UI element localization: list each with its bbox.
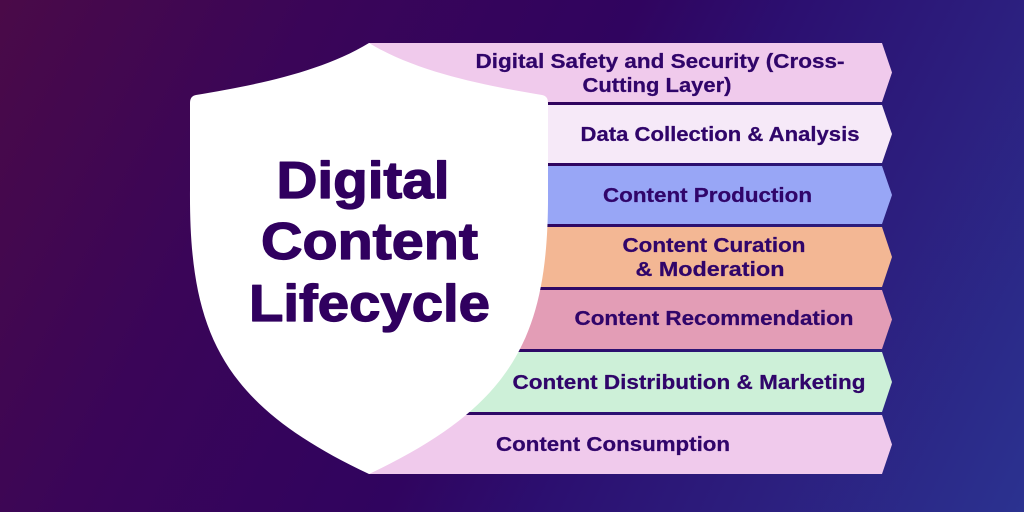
stage: Content Curation & Moderation: [530, 227, 892, 287]
title: Content: [261, 213, 478, 271]
stage: Digital Safety and Security: Digital Safety and Security (Cross-: [476, 51, 844, 73]
stage: Content Consumption: Content Consumption: [496, 434, 730, 456]
lifecycle stages: [369, 43, 892, 474]
stage: Content Distribution & Marketing: Content Distribution & Marketing: [512, 372, 866, 394]
title: Lifecycle: [249, 275, 490, 333]
stage: Content Distribution & Marketing: [440, 352, 892, 412]
stage: Content Recommendation: Content Recommendation: [574, 308, 854, 330]
stage: Data Collection & Analysis: Data Collection & Analysis: [580, 124, 860, 146]
stage: Content Curation & Moderation: & Moderation: [636, 259, 784, 281]
stage: Content Consumption: [369, 415, 892, 474]
stage: Content Recommendation: [500, 290, 892, 349]
stage: Data Collection & Analysis: [540, 105, 892, 163]
icon: shield: [190, 43, 548, 474]
stage: Digital Safety and Security: [369, 43, 892, 102]
stage: Content Curation & Moderation: Content Curation: [622, 235, 806, 257]
title: [249, 152, 490, 333]
title: Digital: [276, 152, 450, 210]
stage: Digital Safety and Security: Cutting Layer): [582, 75, 732, 97]
stage: Content Production: Content Production: [603, 185, 812, 207]
stage: Content Production: [540, 166, 892, 224]
shield with title: [190, 43, 548, 474]
